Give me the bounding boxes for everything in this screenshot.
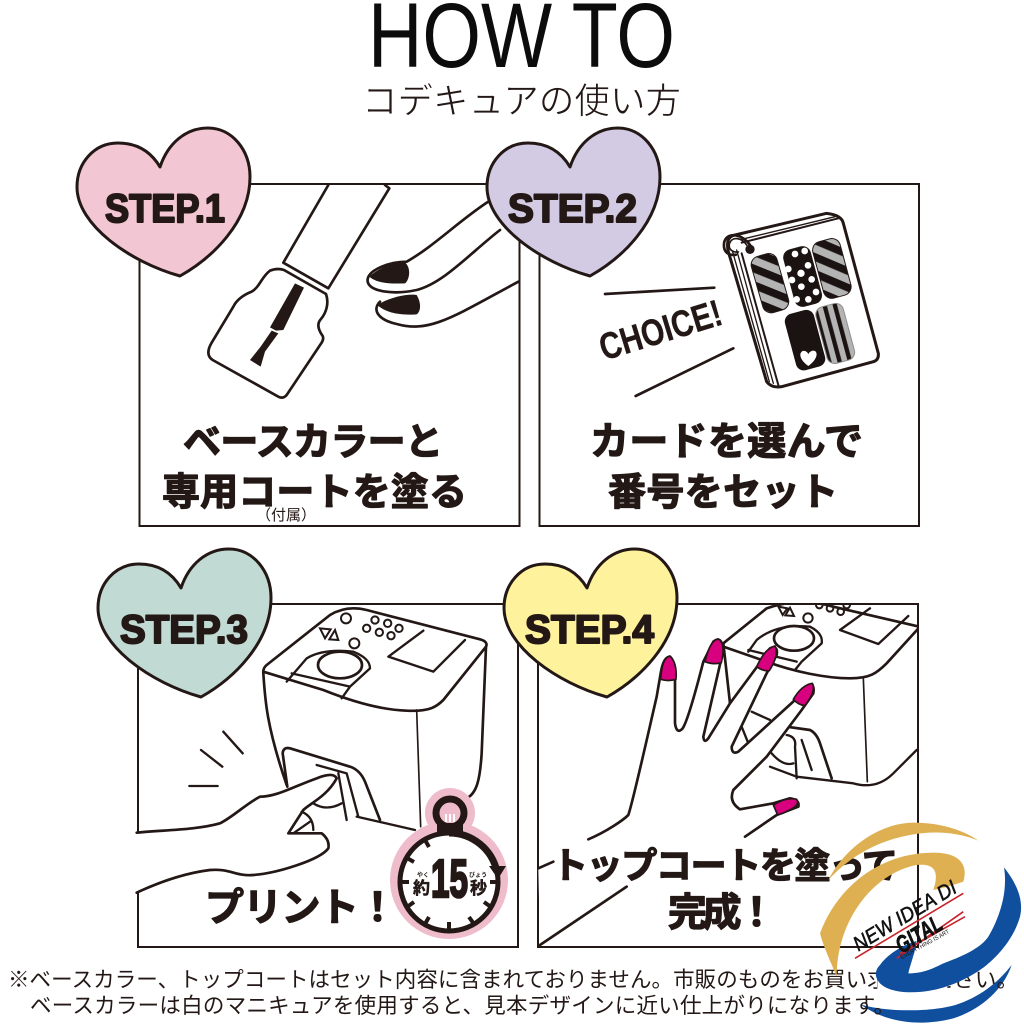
panel 3 caption: プリント！ [205, 887, 397, 930]
footnote: ベースカラーは白のマニキュアを使用すると、見本デザインに近い仕上がりになります。 [30, 994, 895, 1018]
icon: stopwatch about 15 seconds [390, 788, 508, 939]
icon: nail polish bottle and sleeve [208, 185, 389, 398]
icon: stopwatch about 15 seconds: 15 [431, 849, 468, 909]
heart: step 1 [77, 128, 250, 276]
panel 4 caption: 完成！ [668, 892, 776, 935]
panel 2 caption: 番号をセット [608, 472, 838, 514]
panel 2 caption [590, 421, 863, 514]
heart: step 2 [487, 128, 660, 276]
heart: step 1: STEP.1 [105, 187, 225, 231]
icon: stopwatch about 15 seconds: びょう [469, 871, 487, 879]
logo: new idea digital watermark [820, 823, 1021, 992]
heart: step 4: STEP.4 [525, 608, 655, 652]
panel: step 1 [140, 184, 520, 526]
callout: CHOICE! [594, 288, 733, 396]
icon: motion rays [189, 732, 243, 786]
panel 1 caption: 専用コートを塗る [162, 472, 467, 514]
panel 4 caption: トップコートを塗って [552, 845, 898, 886]
panel: step 3 [137, 604, 518, 947]
logo: new idea digital watermark: GITAL [891, 910, 948, 959]
panel 4 caption [552, 845, 898, 935]
icon: hand with magenta nails [538, 639, 814, 945]
icon: shoes and legs [368, 202, 518, 327]
icon: printer machine behind hand [723, 602, 933, 785]
heart: step 3 [98, 549, 271, 697]
panel 1 caption: （付属） [256, 507, 316, 524]
panel 1 caption: ベースカラーと [183, 422, 443, 464]
callout: CHOICE!: CHOICE! [594, 291, 727, 368]
footnote [8, 968, 1018, 1018]
panel: step 2 [540, 184, 919, 526]
icon: stopwatch about 15 seconds: やく [417, 871, 429, 879]
heart: step 2: STEP.2 [508, 187, 637, 231]
icon: small white heart [800, 351, 817, 366]
panel: step 4 [538, 602, 933, 947]
logo swoosh: lower blue arc under footnote [860, 965, 1012, 1023]
logo: new idea digital watermark: NEW IDEA DI [849, 876, 961, 956]
icon: printer machine [263, 608, 487, 830]
panel 1 caption [162, 422, 467, 524]
logo: new idea digital watermark: EVERYTHING IS ART [900, 929, 951, 961]
icon: pressing hand [137, 775, 337, 893]
subtitle: コデキュアの使い方 [362, 81, 681, 121]
heart: step 3: STEP.3 [120, 608, 248, 652]
icon: card ring [724, 235, 750, 255]
icon: card book [724, 213, 878, 387]
heart: step 4 [504, 549, 677, 697]
icon: stopwatch about 15 seconds: 秒 [470, 879, 487, 898]
panel 2 caption: カードを選んで [590, 421, 863, 464]
icon: stopwatch about 15 seconds: 約 [413, 879, 430, 898]
footnote: ※ベースカラー、トップコートはセット内容に含まれておりません。市販のものをお買い求めください。 [8, 968, 1018, 992]
